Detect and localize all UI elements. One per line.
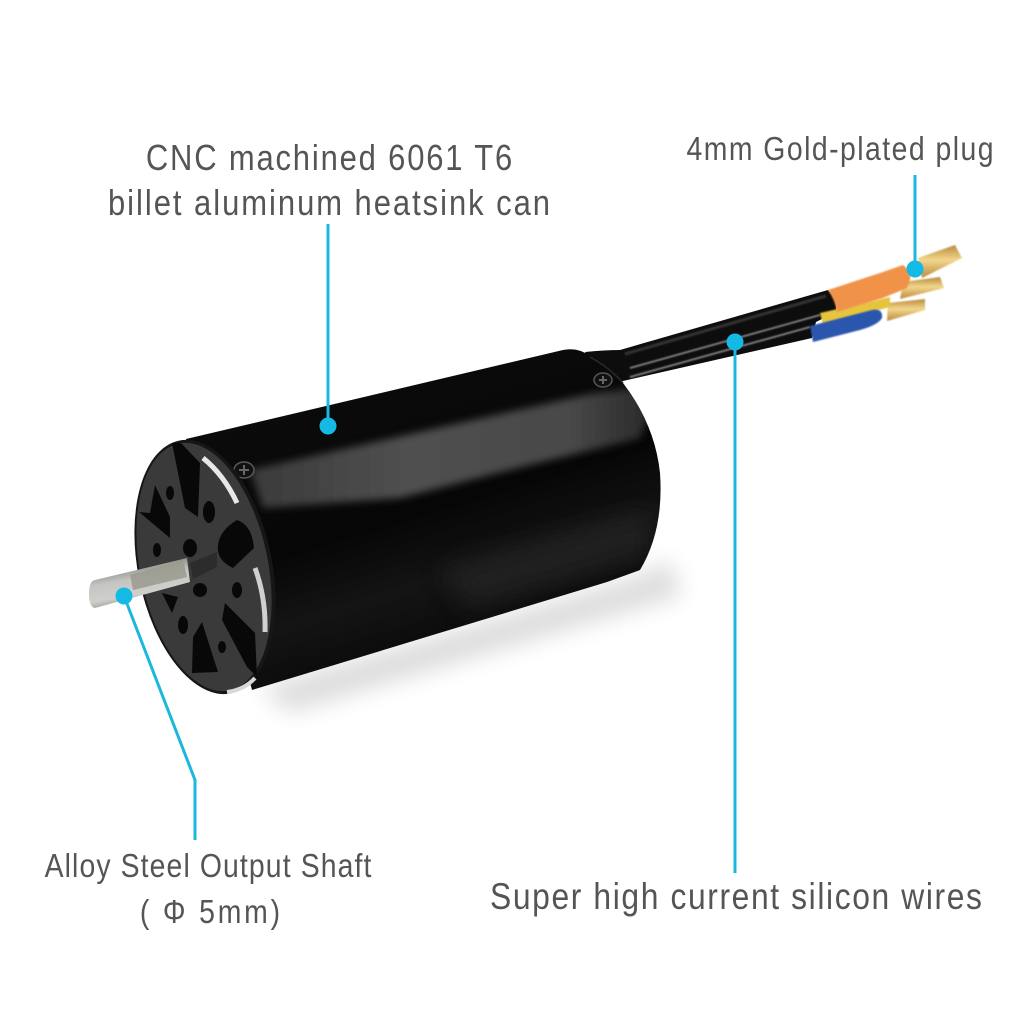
callout: silicon wires: [490, 334, 982, 918]
output shaft: [89, 552, 217, 608]
icon: front screw: [234, 462, 254, 478]
callout: gold plug: 4mm Gold-plated plug: [686, 130, 994, 168]
callout: output shaft: [45, 588, 372, 931]
icon: rear screw: [594, 373, 612, 387]
heading: heatsink can: CNC machined 6061 T6: [146, 139, 512, 179]
callout: output shaft: Alloy Steel Output Shaft: [45, 847, 372, 885]
motor illustration: [89, 245, 962, 707]
icon: gold plugs: [887, 245, 962, 321]
motor wires: [585, 245, 962, 381]
blue heat shrink: [810, 310, 882, 342]
callout: silicon wires: Super high current silicon wires: [490, 877, 982, 918]
yellow heat shrink: [820, 297, 890, 325]
orange heat shrink: [828, 265, 910, 312]
callout: output shaft: ( Φ 5mm): [140, 893, 280, 931]
callout: heatsink can: billet aluminum heatsink can: [108, 184, 550, 224]
callout: gold plug: [686, 130, 994, 278]
motor front face: [113, 427, 297, 707]
motor can: [186, 349, 661, 690]
callout: heatsink can: [108, 139, 550, 435]
